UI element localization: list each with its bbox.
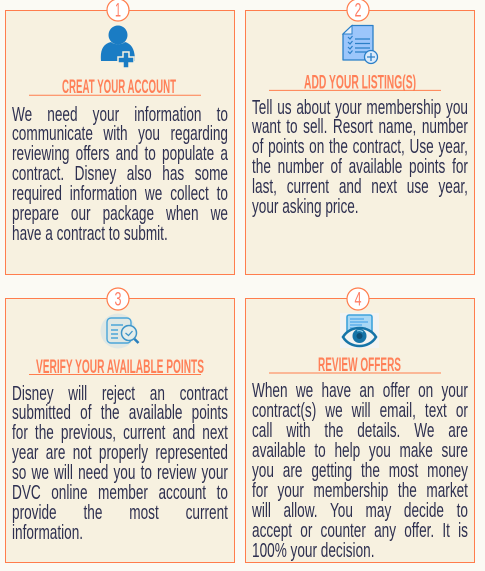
panel: step 3 verify points [5, 287, 235, 563]
icon: user with plus [100, 26, 135, 68]
text block 1: reviewing offers and to populate a [12, 143, 228, 165]
text block 4: 100% your decision. [252, 540, 375, 562]
text block 2: Tell us about your membership you [252, 97, 468, 119]
panel box 4 [245, 298, 474, 563]
text block 3: submitted of the available points [12, 402, 228, 424]
number badge 4 [346, 287, 370, 311]
text block 4: contract(s) we will email, text or [252, 400, 468, 422]
text block 1: prepare our package when we [12, 203, 228, 225]
text block 1: contract. Disney also has some [12, 163, 228, 185]
text block 3 [12, 383, 228, 544]
panel box 3 [5, 298, 235, 563]
icon: checklist document with plus [342, 24, 378, 64]
panel: step 1 create account [5, 0, 235, 275]
text block 4: When we have an offer on your [252, 380, 468, 402]
text block 2: of points on the contract, Use year, [252, 136, 468, 158]
number badge 3: 3 [114, 289, 122, 310]
text block 3: DVC online member account to [12, 482, 228, 504]
text block 2: last, current and next use year, [252, 176, 468, 198]
number badge 3 [106, 287, 130, 311]
panel box 2 [245, 10, 474, 275]
number badge 1: 1 [115, 0, 121, 22]
text block 4 [252, 380, 468, 562]
number badge 4: 4 [354, 289, 362, 310]
panel: step 4 review offers [245, 287, 475, 563]
panel box 1 [5, 10, 235, 275]
panel: step 2 add listing [245, 0, 475, 275]
text block 3: so we will need you to review your [12, 462, 228, 484]
text block 3: for the previous, current and next [12, 422, 228, 444]
text block 2: the number of available points for [252, 156, 468, 178]
text block 4: call with the details. We are [252, 420, 468, 442]
text block 3: information. [12, 522, 83, 544]
text block 4: will allow. You may decide to [252, 500, 468, 522]
text block 4: for your membership the market [252, 480, 468, 502]
text block 2: want to sell. Resort name, number [252, 116, 468, 138]
text block 3: Disney will reject an contract [12, 383, 228, 405]
text block 1: We need your information to [12, 104, 228, 126]
text block 1: have a contract to submit. [12, 223, 168, 245]
text block 3: year are not properly represented [12, 442, 228, 464]
text block 4: accept or counter any offer. It is [252, 520, 468, 542]
text block 1 [12, 104, 228, 245]
text block 4: you are getting the most money [252, 460, 468, 482]
icon: document under magnifier with check [100, 314, 140, 348]
number badge 2 [346, 0, 370, 22]
text block 2 [252, 97, 468, 218]
text block 3: provide the most current [12, 502, 228, 524]
text block 1: required information we collect to [12, 183, 228, 205]
number badge 2: 2 [354, 0, 362, 22]
text block 1: communicate with you regarding [12, 123, 228, 145]
number badge 1 [106, 0, 130, 22]
icon: eye over document [340, 313, 379, 348]
text block 2: your asking price. [252, 196, 359, 218]
text block 4: available to help you make sure [252, 440, 468, 462]
